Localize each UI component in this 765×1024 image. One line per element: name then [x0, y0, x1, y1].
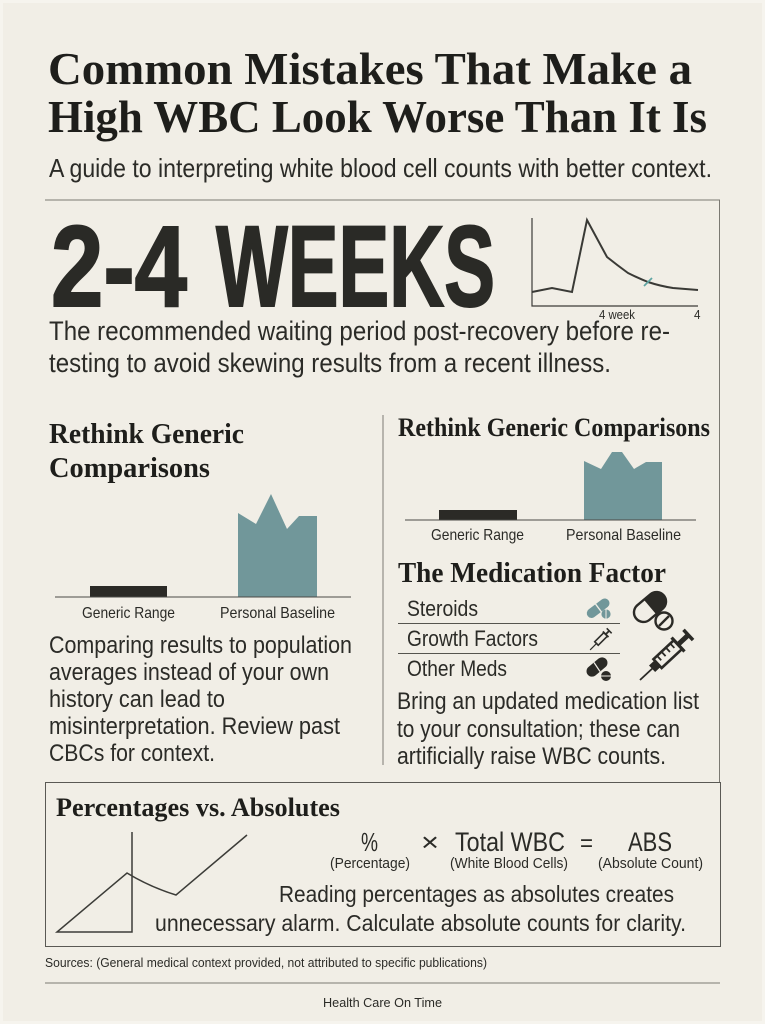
- body text: artificially raise WBC counts.: [397, 743, 666, 770]
- title: High WBC Look Worse Than It Is: [48, 91, 707, 142]
- formula: Total WBC: [455, 827, 565, 857]
- icon: large syringe: [634, 628, 695, 687]
- description: The recommended waiting period post-recovery before re-: [49, 316, 670, 346]
- heading: Rethink Generic Comparisons: [398, 413, 710, 442]
- row: growth factors: Growth Factors: [407, 626, 538, 651]
- formula: (Absolute Count): [598, 855, 703, 872]
- body text: unnecessary alarm. Calculate absolute counts for clarity.: [155, 910, 686, 936]
- icon: teal pills: [585, 597, 611, 620]
- panel: medication factor: [397, 558, 699, 770]
- panel: rethink generic comparisons (left): [49, 419, 352, 767]
- body text: Reading percentages as absolutes creates: [279, 881, 674, 907]
- line chart: recovery curve: [532, 218, 700, 322]
- bar chart: [405, 452, 696, 544]
- body text: Bring an updated medication list: [397, 688, 699, 715]
- line chart: [57, 832, 247, 932]
- big number: 2-4: [51, 203, 187, 331]
- sources: Sources: (General medical context provided, not attributed to specific publications): [45, 955, 487, 970]
- body text: history can lead to: [49, 686, 225, 713]
- body text: [155, 881, 686, 936]
- formula: ABS: [628, 827, 672, 857]
- chart label: 4 week: 4 week: [599, 307, 635, 322]
- heading: Comparisons: [49, 453, 210, 484]
- panel: rethink generic comparisons (right): [398, 413, 710, 544]
- heading: Rethink Generic: [49, 419, 244, 450]
- heading: [49, 419, 244, 484]
- formula: =: [580, 830, 593, 857]
- heading: The Medication Factor: [398, 558, 666, 589]
- chart label: 4: 4: [694, 307, 700, 322]
- body text: CBCs for context.: [49, 740, 215, 767]
- bar label: generic: Generic Range: [431, 527, 524, 544]
- description: [49, 316, 670, 378]
- title: Common Mistakes That Make a: [48, 43, 692, 94]
- chart marker: [644, 278, 652, 286]
- bar label: personal: Personal Baseline: [566, 527, 681, 544]
- formula: (Percentage): [330, 855, 410, 872]
- body text: [49, 632, 352, 767]
- description: testing to avoid skewing results from a recent illness.: [49, 348, 611, 378]
- row: steroids: Steroids: [407, 596, 478, 621]
- heading: Percentages vs. Absolutes: [56, 793, 340, 822]
- formula: [330, 827, 703, 872]
- icon: dark pills: [584, 655, 611, 681]
- icon: large capsule and tablet: [630, 588, 672, 630]
- body text: misinterpretation. Review past: [49, 713, 340, 740]
- body text: [397, 688, 699, 770]
- row: other meds: Other Meds: [407, 656, 507, 681]
- bar label: generic: Generic Range: [82, 605, 175, 622]
- formula: (White Blood Cells): [450, 855, 568, 872]
- panel: 2-4 weeks: [49, 203, 700, 378]
- body text: averages instead of your own: [49, 659, 329, 686]
- body text: Comparing results to population: [49, 632, 352, 659]
- big number: WEEKS: [216, 203, 495, 331]
- big number: [51, 203, 495, 331]
- formula: ×: [421, 827, 439, 857]
- body text: to your consultation; these can: [397, 716, 680, 743]
- title: [48, 43, 707, 142]
- formula: %: [361, 827, 378, 857]
- bar chart: [55, 494, 351, 622]
- footer: Health Care On Time: [323, 995, 442, 1010]
- bar label: personal: Personal Baseline: [220, 605, 335, 622]
- panel: percentages vs absolutes: [46, 782, 720, 946]
- icon: small syringe: [587, 628, 612, 653]
